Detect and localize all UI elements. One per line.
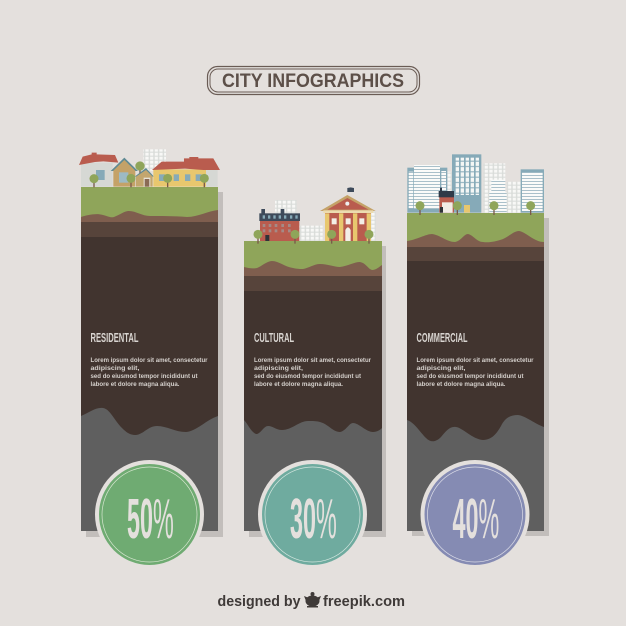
text block: cultural: labore et dolore magna aliqua.	[254, 381, 343, 388]
text block: commercial: adipiscing elit,	[416, 365, 466, 372]
text block: cultural: adipiscing elit,	[254, 365, 303, 372]
heading: commercial: COMMERCIAL	[416, 331, 468, 345]
buildings: skyline	[407, 154, 544, 215]
text block: residential: sed do eiusmod tempor incididunt ut	[90, 373, 198, 380]
footer credit: freepik.com	[323, 593, 405, 610]
text block: residential: labore et dolore magna aliqua.	[90, 381, 180, 388]
text block: cultural: Lorem ipsum dolor sit amet, consectetur	[254, 357, 372, 364]
icon: freepik mascot	[304, 592, 321, 608]
text block: commercial: sed do eiusmod tempor incididunt ut	[416, 373, 524, 380]
text block: commercial	[416, 357, 534, 388]
panel: cultural	[244, 187, 386, 537]
grass	[81, 187, 218, 217]
soil	[407, 226, 544, 247]
footer credit: designed by	[218, 593, 301, 610]
badge: 50%: 50%	[127, 488, 174, 551]
bedrock	[244, 420, 382, 531]
soil	[81, 205, 218, 222]
grass	[407, 213, 544, 242]
rock band	[81, 222, 218, 237]
badge: 40%	[420, 460, 530, 569]
heading: residential: RESIDENTAL	[90, 331, 139, 345]
text block: residential: Lorem ipsum dolor sit amet, consectetur	[90, 357, 208, 364]
panel: commercial	[407, 154, 549, 536]
panel: residential	[79, 149, 223, 537]
title: CITY INFOGRAPHICS	[222, 71, 404, 92]
text block: residential	[90, 357, 208, 388]
badge: 40%: 40%	[452, 488, 499, 551]
rock band	[407, 247, 544, 261]
grass	[244, 241, 382, 270]
text block: residential: adipiscing elit,	[90, 365, 140, 372]
text block: cultural: sed do eiusmod tempor incididunt ut	[254, 373, 362, 380]
buildings: houses	[79, 149, 220, 187]
badge: 50%	[95, 460, 204, 569]
footer credit	[218, 592, 405, 610]
bedrock	[81, 408, 218, 531]
text block: commercial: Lorem ipsum dolor sit amet, consectetur	[416, 357, 534, 364]
text block: commercial: labore et dolore magna aliqua.	[416, 381, 506, 388]
badge: 30%: 30%	[290, 488, 337, 551]
soil	[244, 255, 382, 276]
heading: cultural: CULTURAL	[254, 331, 294, 345]
rock band	[244, 276, 382, 291]
title	[208, 66, 420, 94]
badge: 30%	[258, 460, 367, 569]
text block: cultural	[254, 357, 372, 388]
buildings: town hall and brick block	[253, 187, 376, 244]
bedrock	[407, 415, 544, 531]
